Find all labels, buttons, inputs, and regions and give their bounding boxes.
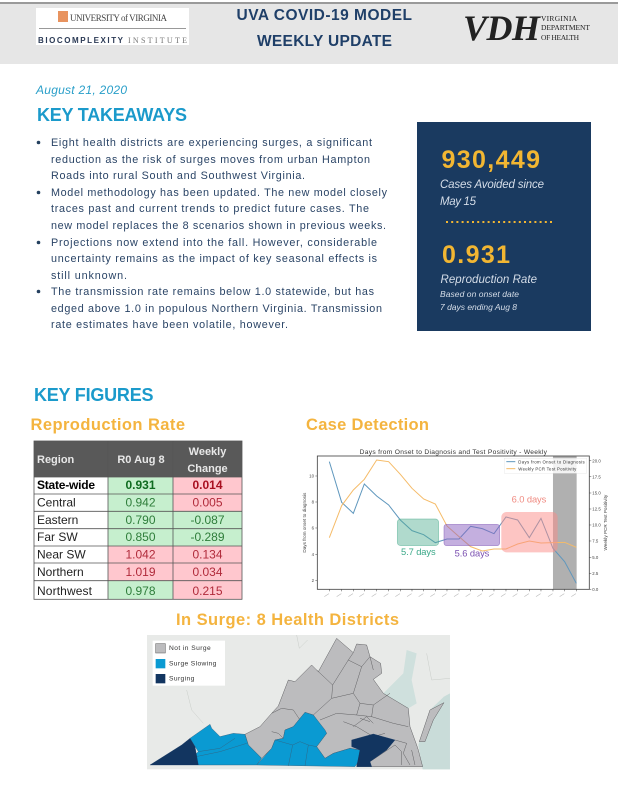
table weekly change values: 0.134 [192, 548, 223, 562]
stat: cases avoided: 930,449 [442, 146, 540, 174]
table region names: Near SW [37, 548, 86, 562]
callout: 5.7 days: 5.7 days [401, 547, 436, 557]
logo: University of Virginia Biocomplexity Institute: INSTITUTE [128, 36, 187, 45]
table weekly change values: 0.034 [192, 565, 223, 579]
callout: 6.0 days [501, 495, 558, 552]
heading: case detection: Case Detection [306, 416, 429, 434]
table R0 values: 0.942 [125, 496, 156, 510]
table R0 values: 0.790 [125, 513, 156, 527]
chart axes: 7.5 [592, 539, 599, 544]
table weekly change values: 0.215 [192, 584, 223, 598]
chart axes: 17.5 [592, 474, 601, 479]
table R0 values: 0.850 [125, 530, 156, 544]
logo: Virginia Department of Health: DEPARTMENT [541, 23, 590, 32]
table region names: Far SW [37, 530, 78, 544]
chart legend: Weekly PCR Test Positivity [518, 466, 577, 471]
header title: UVA COVID-19 MODEL [236, 7, 412, 24]
chart axes: 8 [312, 500, 315, 505]
table header row: Weekly [189, 446, 227, 458]
key takeaways bullet list: Eight health districts are experiencing surges, a significant [51, 137, 372, 149]
table R0 values: 0.978 [125, 584, 156, 598]
table weekly change values: 0.005 [192, 496, 223, 510]
heading: key takeaways: KEY TAKEAWAYS [37, 105, 187, 125]
chart axes: 10.0 [592, 523, 601, 528]
table R0 values: 1.042 [125, 548, 156, 562]
key takeaways bullet list: still unknown. [51, 270, 127, 282]
date: August 21, 2020 [35, 83, 127, 97]
logo: Virginia Department of Health [463, 8, 590, 48]
table R0 values [125, 478, 156, 598]
map: not in surge districts [245, 638, 444, 767]
key takeaways bullet list: The transmission rate remains below 1.0 statewide, but has [51, 286, 375, 298]
stat: reproduction rate: Reproduction Rate [440, 274, 537, 286]
legend item: not in surge: Not in Surge [169, 645, 211, 652]
chart axes [302, 456, 608, 597]
table R0 values: 1.019 [125, 565, 156, 579]
callout: 5.6 days: 5.6 days [455, 549, 490, 559]
table weekly change values: 0.014 [192, 478, 223, 492]
table region names: Central [37, 496, 76, 510]
header title [236, 7, 412, 50]
stat: cases avoided [440, 146, 544, 208]
table header row: Region [37, 454, 75, 466]
stat: reproduction rate: 7 days ending Aug 8 [440, 302, 517, 312]
map: surge slowing districts [190, 712, 360, 767]
logo: University of Virginia Biocomplexity Institute: UNIVERSITY of VIRGINIA [70, 13, 168, 23]
table weekly change values: -0.289 [190, 530, 225, 544]
case detection line chart [302, 449, 608, 597]
map background [147, 635, 450, 769]
logo: Virginia Department of Health: VDH [463, 8, 541, 48]
callout: 6.0 days: 6.0 days [512, 495, 547, 505]
chart title: Days from Onset to Diagnosis and Test Positivity - Weekly [360, 449, 548, 456]
table region names: Northern [37, 565, 84, 579]
stat: cases avoided: May 15 [440, 196, 477, 208]
table region names [37, 478, 95, 598]
chart axes: 0.0 [592, 587, 599, 592]
heading: key figures: KEY FIGURES [34, 385, 154, 405]
line: days from onset to diagnosis [329, 462, 576, 583]
chart legend [504, 458, 587, 473]
table weekly change values [190, 478, 225, 598]
callout: 5.7 days [397, 519, 439, 557]
table header row [37, 446, 228, 475]
header title: WEEKLY UPDATE [257, 33, 392, 50]
logo: Virginia Department of Health: OF HEALTH [541, 33, 580, 42]
table R0 values: 0.931 [125, 478, 156, 492]
chart axes: Weekly PCR Test Positivity [603, 494, 608, 551]
table header row: Change [187, 463, 228, 475]
table region names: Northwest [37, 584, 93, 598]
chart legend: Days from Onset to Diagnosis [518, 459, 585, 464]
stat: cases avoided: Cases Avoided since [440, 179, 544, 191]
stat: reproduction rate: Based on onset date [440, 289, 519, 299]
reproduction rate table [34, 441, 242, 599]
chart axes: 5.0 [592, 555, 599, 560]
chart axes: 12.5 [592, 507, 601, 512]
legend item: surging: Surging [169, 675, 195, 682]
key takeaways bullet list: Projections now extend into the fall. However, considerable [51, 237, 377, 249]
chart axes: 20.0 [592, 458, 601, 463]
heading: in surge: In Surge: 8 Health Districts [176, 611, 399, 629]
key takeaways bullet list: Roads into rural South and Southwest Virginia. [51, 170, 305, 182]
stat: reproduction rate: 0.931 [442, 241, 510, 269]
chart axes: 6 [312, 526, 315, 531]
key takeaways bullet list: edged above 1.0 in populous Northern Virginia. Transmission [51, 303, 382, 315]
table header row: R0 Aug 8 [117, 454, 165, 466]
heading: reproduction rate: Reproduction Rate [30, 416, 185, 434]
logo: University of Virginia Biocomplexity Institute: BIOCOMPLEXITY [38, 36, 124, 45]
map: surging districts [150, 734, 395, 767]
table region names: State-wide [37, 478, 95, 492]
legend item: surge slowing: Surge Slowing [169, 660, 217, 667]
map legend [153, 641, 225, 686]
chart axes: 2.5 [592, 571, 599, 576]
table region names: Eastern [37, 513, 78, 527]
key takeaways bullet list: rate estimates have been volatile, however. [51, 319, 288, 331]
key takeaways bullet list [37, 137, 388, 331]
key takeaways bullet list: uncertainty remains as the impact of key seasonal effects is [51, 253, 378, 265]
logo: Virginia Department of Health: VIRGINIA [541, 14, 578, 23]
key takeaways bullet list: traces past and current trends to predict future cases. The [51, 203, 369, 215]
key takeaways bullet list: new model replaces the 8 scenarios shown in previous weeks. [51, 220, 386, 232]
chart axes: Days from onset to diagnosis [302, 492, 307, 553]
table weekly change values: -0.087 [190, 513, 225, 527]
surge map of Virginia [147, 635, 450, 769]
chart axes: 2 [312, 578, 315, 583]
chart axes: 4 [312, 552, 315, 557]
header band [0, 2, 618, 64]
callout: 5.6 days [444, 524, 500, 559]
stats panel [417, 122, 591, 331]
line: weekly PCR test positivity [329, 460, 576, 551]
logo: University of Virginia Biocomplexity Institute [36, 8, 189, 45]
key takeaways bullet list: Model methodology has been updated. The new model closely [51, 187, 388, 199]
stat: reproduction rate [440, 241, 537, 312]
chart axes: 15.0 [592, 491, 601, 496]
chart axes: 10 [309, 474, 315, 479]
key takeaways bullet list: reduction as the risk of surges moves from urban Hampton [51, 154, 370, 166]
